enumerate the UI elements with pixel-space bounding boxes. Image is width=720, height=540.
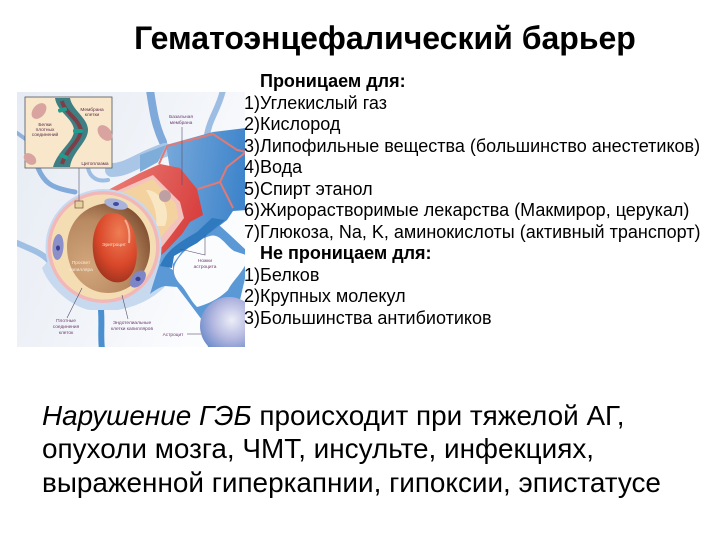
diagram: blood-brain barrier capillary cross-section: Базальная bbox=[169, 114, 193, 120]
text block: permeability lists: 1)Углекислый газ bbox=[244, 93, 387, 113]
text block: permeability lists: 4)Вода bbox=[244, 157, 302, 177]
diagram: blood-brain barrier capillary cross-section: Астроцит bbox=[163, 332, 184, 338]
illustration labels: Эритроцит bbox=[102, 242, 127, 248]
capillary ring bbox=[46, 189, 162, 262]
inset: tight junction detail: Цитоплазма bbox=[81, 161, 109, 167]
pink inner border bbox=[117, 175, 184, 248]
background of illustration bbox=[17, 92, 245, 347]
text block: BBB disruption note: опухоли мозга, ЧМТ, инсульте, инфекциях, bbox=[42, 433, 594, 464]
text block: permeability lists: Не проницаем для: bbox=[260, 243, 432, 263]
text block: permeability lists: 3)Липофильные вещества (большинство анестетиков) bbox=[244, 136, 700, 156]
diagram: blood-brain barrier capillary cross-section: Плотные bbox=[56, 318, 76, 324]
diagram: blood-brain barrier capillary cross-section: клеток bbox=[59, 331, 74, 336]
text block: BBB disruption note: выраженной гиперкапнии, гипоксии, эпистатусе bbox=[42, 467, 661, 498]
diagram: blood-brain barrier capillary cross-section: мембрана bbox=[170, 120, 193, 126]
inset: tight junction detail: Белки bbox=[38, 122, 52, 128]
capillary wall red tube bbox=[108, 164, 203, 258]
lumen bbox=[67, 203, 150, 293]
diagram: blood-brain barrier capillary cross-section: Просвет bbox=[72, 260, 91, 266]
white area between astrocyte arms bbox=[174, 236, 246, 307]
inset: tight junction detail: плотных bbox=[36, 128, 55, 133]
diagram: blood-brain barrier capillary cross-section: соединения bbox=[53, 325, 80, 330]
pale astrocyte sheath around capillary bbox=[42, 262, 166, 310]
white corner area upper right of lower arm bbox=[230, 210, 246, 234]
text block: permeability lists: 2)Крупных молекул bbox=[244, 286, 406, 306]
text block: BBB disruption note bbox=[42, 400, 661, 498]
text block: permeability lists bbox=[244, 71, 700, 328]
endothelium tube interior bbox=[122, 179, 178, 238]
inset marker bbox=[75, 201, 83, 208]
inset: tight junction detail: клетки bbox=[85, 113, 100, 118]
main astrocyte foot (blue) bbox=[155, 128, 246, 264]
upper light blue panel bbox=[140, 145, 166, 172]
endothelial nuclei bbox=[52, 234, 64, 260]
dark blue band along capillary bbox=[160, 218, 225, 268]
title: Гематоэнцефалический барьер bbox=[134, 20, 636, 56]
erythrocyte bbox=[93, 213, 137, 282]
astrocyte cell body bbox=[200, 297, 245, 347]
red seams between foot processes bbox=[159, 134, 246, 208]
diagram: blood-brain barrier capillary cross-section: капилляра bbox=[69, 268, 93, 273]
text block: permeability lists: 6)Жирорастворимые лекарства (Макмирор, церукал) bbox=[244, 200, 689, 220]
diagram: blood-brain barrier capillary cross-section: астроцита bbox=[194, 265, 217, 270]
astrocyte processes bbox=[17, 90, 223, 349]
diagram: blood-brain barrier capillary cross-section: Ножки bbox=[198, 258, 212, 264]
text block: permeability lists: Проницаем для: bbox=[260, 71, 406, 91]
diagram: blood-brain barrier capillary cross-section: Эндотелиальные bbox=[113, 320, 151, 326]
inset: tight junction detail: Мембрана bbox=[80, 107, 104, 113]
diagram: blood-brain barrier capillary cross-section bbox=[17, 92, 245, 347]
text block: permeability lists: 2)Кислород bbox=[244, 114, 340, 134]
lower astrocyte arms bbox=[150, 225, 246, 347]
diagram: blood-brain barrier capillary cross-section: клетки капилляров bbox=[111, 327, 153, 332]
text block: permeability lists: 5)Спирт этанол bbox=[244, 179, 373, 199]
text block: permeability lists: 1)Белков bbox=[244, 265, 319, 285]
leader lines bbox=[67, 127, 205, 334]
inset: tight junction detail: соединений bbox=[32, 131, 59, 138]
text block: permeability lists: 7)Глюкоза, Na, K, аминокислоты (активный транспорт) bbox=[244, 222, 700, 242]
text block: BBB disruption note: Нарушение ГЭБ происходит при тяжелой АГ, bbox=[42, 400, 625, 431]
text block: permeability lists: 3)Большинства антибиотиков bbox=[244, 308, 492, 328]
inset: tight junction detail bbox=[21, 97, 115, 168]
